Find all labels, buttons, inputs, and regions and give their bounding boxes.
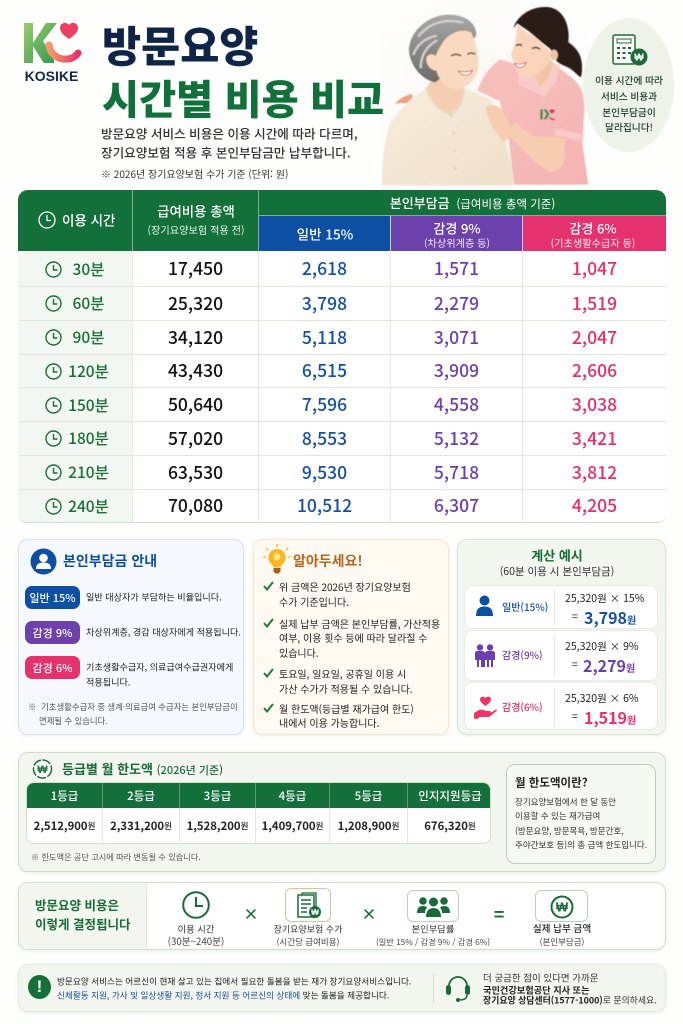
- header: reduced 9%: 감경 9%: [433, 218, 481, 238]
- note 4: 월 한도액(등급별 재가급여 한도): [279, 701, 414, 716]
- formula: usage time: [168, 891, 224, 948]
- elderly woman eyes and mouth: [451, 53, 475, 56]
- guide item: reduced 6: 감경 6%: [33, 660, 72, 676]
- title line 1: 방문요양: [102, 14, 258, 75]
- header: usage time: [18, 190, 133, 251]
- header: general 15%: 일반 15%: [297, 223, 353, 243]
- example card: general: 3,798원: [584, 605, 636, 629]
- caregiver shirt: [478, 59, 588, 185]
- row 210분: 9,530: [302, 460, 347, 485]
- operator: ×: [361, 904, 377, 924]
- header: reduced 6%: (기초생활수급자 등): [551, 235, 635, 250]
- grade table: 1,528,200: [187, 818, 241, 834]
- service description: 방문요양 서비스는 어르신이 현재 살고 있는 집에서 필요한 돌봄을 받는 재가 장기요양서비스입니다.: [57, 976, 411, 988]
- row 210분: 210분: [68, 461, 109, 483]
- operator: =: [494, 901, 504, 927]
- caregiver hair: [513, 7, 569, 60]
- panel: cost formula: [18, 882, 666, 950]
- example card: general: 일반(15%): [502, 599, 548, 614]
- grade table: 원: [468, 820, 476, 832]
- example card: reduced 9: =: [572, 657, 578, 672]
- formula: usage time: (30분~240분): [168, 934, 224, 948]
- header: co-payment: 본인부담금 (급여비용 총액 기준): [390, 193, 555, 212]
- table header: [18, 190, 666, 251]
- row 180분: 57,020: [168, 426, 223, 451]
- row 30분: 30분: [73, 258, 104, 280]
- row 90분: 34,120: [168, 325, 223, 350]
- guide item: reduced 9: 차상위계층, 경감 대상자에게 적용됩니다.: [86, 624, 241, 638]
- callout text: 서비스 비용과: [601, 89, 657, 103]
- subtitle text: 방문요양 서비스 비용은 이용 시간에 따라 다르며,: [101, 124, 358, 143]
- heading: 본인부담금 안내: [63, 551, 157, 571]
- row 180분: 3,421: [572, 426, 617, 451]
- formula: actual payment: [533, 890, 591, 948]
- operator: ×: [243, 904, 259, 924]
- header: total benefit cost: [133, 190, 259, 251]
- row 90분: 90분: [73, 326, 104, 348]
- row 120분: 43,430: [168, 358, 223, 383]
- guide item: reduced 6: [25, 656, 233, 688]
- note 1: [263, 579, 411, 609]
- contact text: 더 궁금한 점이 있다면 가까운: [483, 970, 599, 984]
- icon: calculator with won coin: [612, 34, 648, 66]
- icon: KC heart mark: [24, 22, 82, 63]
- formula: usage time: 이용 시간: [178, 921, 214, 935]
- row 240분: [18, 490, 666, 523]
- note 1: 위 금액은 2026년 장기요양보험: [279, 579, 411, 594]
- logo: [24, 22, 82, 84]
- note 4: [263, 701, 414, 730]
- caregiver back hand: [395, 94, 413, 104]
- contact text: 장기요양 상담센터(1577-1000)로 문의하세요.: [483, 994, 657, 1007]
- row 60분: [18, 287, 666, 321]
- header: reduced 9%: (차상위계층 등): [424, 235, 490, 250]
- cardigan buttons: [449, 113, 453, 116]
- note 3: 가산 수가가 적용될 수 있습니다.: [279, 681, 413, 696]
- subheading: (60분 이용 시 본인부담금): [500, 564, 614, 579]
- subtitle text: [101, 124, 358, 162]
- callout text: 이용 시간에 따라: [595, 73, 663, 87]
- grade table: 원: [392, 820, 399, 832]
- elderly woman hair: [409, 15, 476, 82]
- callout text: [595, 73, 663, 134]
- note 3: 토요일, 일요일, 공휴일 이용 시: [279, 666, 406, 681]
- note 3: [263, 666, 413, 696]
- caregiver eyes and mouth: [516, 45, 540, 49]
- shirt logo: [540, 109, 549, 119]
- grade table: 1,409,700: [262, 818, 316, 834]
- icon: two people: [475, 644, 495, 667]
- caregiver neck: [528, 58, 558, 89]
- note 2: [263, 616, 440, 660]
- header: reduced 6%: 감경 6%: [569, 218, 617, 238]
- column 5등급: 5등급: [355, 788, 382, 804]
- row 210분: 63,530: [168, 460, 223, 485]
- row 240분: 70,080: [168, 493, 223, 518]
- icon: single person: [476, 596, 493, 616]
- row 30분: 17,450: [168, 256, 223, 281]
- row 90분: 5,118: [302, 325, 347, 350]
- cost table: [18, 190, 666, 523]
- column 3등급: [180, 783, 256, 808]
- row 210분: [18, 456, 666, 490]
- guide item: reduced 6: 적용됩니다.: [86, 674, 130, 688]
- example card: reduced 6: [464, 682, 658, 730]
- panel: footer information: [18, 964, 666, 1012]
- row 60분: 60분: [73, 292, 104, 314]
- grade table: 1,208,900: [338, 818, 392, 834]
- formula: insurance fee: ₩: [311, 908, 319, 917]
- panel: notes: [253, 539, 449, 735]
- guide item: reduced 9: 감경 9%: [33, 624, 72, 640]
- footnote: base year: ※ 2026년 장기요양보험 수가 기준 (단위: 원): [101, 166, 288, 181]
- photo illustration: caregiver and elderly woman: [382, 6, 589, 186]
- row 150분: [18, 388, 666, 422]
- example card: reduced 6: 1,519원: [584, 704, 636, 728]
- subtitle text: 장기요양보험 적용 후 본인부담금만 납부합니다.: [101, 143, 351, 162]
- guide note: 면제될 수 있습니다.: [39, 715, 108, 727]
- row 90분: [18, 321, 666, 354]
- grade table: 2,512,900: [34, 818, 88, 834]
- icon: won badge: ₩: [37, 764, 48, 776]
- guide note: ※ 기초생활수급자 중 생계·의료급여 수급자는 본인부담금이: [28, 701, 238, 713]
- column 2등급: [103, 783, 180, 808]
- service description: [57, 976, 411, 1002]
- column 4등급: 4등급: [279, 788, 306, 804]
- row 120분: 6,515: [302, 358, 347, 383]
- row 60분: 3,798: [302, 291, 347, 316]
- row 30분: [18, 251, 666, 287]
- title: [102, 14, 384, 126]
- callout text: 본인부담금이: [602, 105, 656, 119]
- row 90분: 2,047: [572, 325, 617, 350]
- row 150분: 4,558: [434, 392, 479, 417]
- cardigan collar: [427, 87, 464, 113]
- column 5등급: [330, 783, 408, 808]
- row 240분: 240분: [68, 495, 109, 517]
- example card: reduced 9: 25,320원 × 9%: [565, 638, 639, 653]
- guide item: reduced 6: 기초생활수급자, 의료급여수급권자에게: [86, 659, 233, 673]
- row 60분: 1,519: [572, 291, 617, 316]
- elderly woman face: [426, 31, 478, 89]
- definition box: [506, 764, 656, 864]
- icon: exclamation: !: [37, 977, 42, 996]
- formula: insurance fee: [274, 888, 342, 948]
- row 180분: 8,553: [302, 426, 347, 451]
- example card: reduced 9: 감경(9%): [502, 647, 543, 662]
- formula: co-pay rate: 본인부담률: [412, 921, 454, 935]
- row 60분: 2,279: [434, 291, 479, 316]
- row 30분: 1,571: [434, 256, 479, 281]
- caregiver forearm: [507, 122, 565, 171]
- callout text: 달라집니다!: [605, 120, 653, 134]
- formula: insurance fee: 장기요양보험 수가: [274, 922, 342, 936]
- formula heading: [19, 883, 147, 951]
- definition box: (방문요양, 방문목욕, 방문간호,: [515, 825, 624, 837]
- icon: won badge: [32, 759, 52, 779]
- logo wordmark: KOSIKE: [25, 68, 78, 84]
- row 210분: 3,812: [572, 460, 617, 485]
- contact text: 국민건강보험공단 지사 또는: [483, 982, 590, 996]
- header: usage time: 이용 시간: [62, 209, 115, 229]
- row 60분: 25,320: [168, 291, 223, 316]
- row 180분: 180분: [68, 427, 109, 449]
- row 150분: 150분: [68, 394, 109, 416]
- heading: 등급별 월 한도액 (2026년 기준): [62, 758, 223, 778]
- definition box: 장기요양보험에서 한 달 동안: [515, 796, 616, 808]
- example card: general: =: [572, 609, 578, 624]
- note list: [263, 579, 440, 730]
- heading: 알아두세요!: [293, 551, 363, 571]
- row 150분: 50,640: [168, 392, 223, 417]
- note 2: 여부, 이용 횟수 등에 따라 달라질 수: [279, 630, 427, 645]
- formula: co-pay rate: [376, 890, 490, 948]
- header: total benefit cost: 급여비용 총액: [157, 200, 235, 220]
- row 90분: 3,071: [434, 325, 479, 350]
- note 1: 수가 기준입니다.: [279, 594, 349, 609]
- column 2등급: 2등급: [127, 788, 155, 804]
- icon: light bulb: [263, 544, 291, 574]
- definition box: 월 한도액이란?: [515, 774, 588, 790]
- icon: person: [30, 548, 56, 574]
- panel: co-payment guide: [18, 539, 244, 735]
- grade table: 원: [241, 820, 248, 832]
- grade note: ※ 한도액은 공단 고시에 따라 변동될 수 있습니다.: [31, 851, 201, 863]
- row 240분: 6,307: [434, 493, 479, 518]
- row 30분: 1,047: [572, 256, 617, 281]
- panel: monthly limit by grade: [18, 752, 666, 872]
- example card: reduced 9: 2,279원: [583, 653, 635, 677]
- elderly woman neck: [427, 75, 464, 112]
- note 2: 있습니다.: [279, 645, 319, 660]
- service description: 신체활동 지원, 가사 및 일상생활 지원, 정서 지원 등 어르신의 상태에 맞는 돌봄을 제공합니다.: [57, 990, 389, 1002]
- note 2: 실제 납부 금액은 본인부담률, 가산적용: [279, 616, 440, 631]
- icon: exclamation: [28, 975, 51, 999]
- example card: reduced 6: 25,320원 × 6%: [565, 690, 639, 705]
- grade table: 2,331,200: [110, 818, 164, 834]
- grade table: 676,320: [424, 818, 468, 834]
- row 120분: [18, 354, 666, 388]
- row 240분: 4,205: [572, 493, 617, 518]
- icon: calculator with won coin: ₩: [634, 52, 644, 64]
- caregiver collar: [518, 62, 560, 97]
- row 240분: 10,512: [297, 493, 352, 518]
- caregiver sleeve hem: [554, 128, 584, 142]
- formula: actual payment: 실제 납부 금액: [533, 921, 591, 935]
- guide item: general: 일반 대상자가 부담하는 비율입니다.: [86, 589, 222, 603]
- header: general 15%: [259, 215, 391, 251]
- row 210분: 5,718: [434, 460, 479, 485]
- grade table: [26, 782, 491, 844]
- example card: general: 25,320원 × 15%: [565, 590, 644, 605]
- guide item: reduced 9: [25, 621, 241, 644]
- row 120분: 3,909: [434, 358, 479, 383]
- formula heading: 방문요양 비용은: [35, 895, 119, 914]
- row 180분: [18, 422, 666, 456]
- column 1등급: 1등급: [51, 788, 78, 804]
- example card: reduced 6: =: [572, 708, 578, 723]
- formula heading: 이렇게 결정됩니다: [35, 914, 131, 933]
- panel: calculation example: [457, 539, 666, 735]
- row 120분: 120분: [68, 360, 109, 382]
- example card: general: [464, 585, 658, 629]
- caregiver ponytail: [556, 41, 582, 77]
- column 3등급: 3등급: [204, 788, 231, 804]
- row 120분: 2,606: [572, 358, 617, 383]
- guide item: general: [25, 586, 222, 609]
- caregiver ear: [550, 50, 558, 60]
- formula: co-pay rate: (일반 15% / 감경 9% / 감경 6%): [376, 936, 490, 948]
- grade table: 원: [88, 820, 95, 832]
- formula: actual payment: (본인부담금): [540, 936, 584, 948]
- icon: heart in hand: [474, 696, 497, 719]
- example card: reduced 9: [464, 630, 658, 681]
- grade table: 원: [316, 820, 323, 832]
- definition box: 주야간보호 등)의 총 금액 한도입니다.: [515, 839, 647, 851]
- heading: 계산 예시: [531, 546, 583, 564]
- caregiver face: [511, 24, 551, 77]
- grade table: 원: [164, 820, 172, 832]
- definition box: 이용할 수 있는 재가급여: [515, 810, 600, 822]
- row 150분: 7,596: [302, 392, 347, 417]
- title line 2: 시간별 비용 비교: [102, 67, 384, 126]
- guide note: [28, 701, 238, 727]
- caregiver hand: [486, 105, 514, 142]
- header: total benefit cost: (장기요양보험 적용 전): [148, 222, 244, 237]
- icon: headset: [446, 976, 470, 1002]
- guide item: general: 일반 15%: [29, 590, 76, 606]
- formula: insurance fee: (시간당 급여비용): [277, 936, 339, 948]
- column 4등급: [256, 783, 330, 808]
- column 인지지원등급: 인지지원등급: [418, 788, 482, 804]
- note 4: 내에서 이용 가능합니다.: [279, 715, 379, 730]
- header: reduced 9%: [391, 215, 523, 251]
- elderly woman cardigan: [382, 88, 513, 185]
- column 1등급: [27, 783, 103, 808]
- callout bubble: [583, 18, 674, 152]
- row 30분: 2,618: [302, 256, 347, 281]
- header: reduced 6%: [523, 215, 666, 251]
- row 180분: 5,132: [434, 426, 479, 451]
- row 150분: 3,038: [572, 392, 617, 417]
- formula: actual payment: ₩: [556, 900, 569, 914]
- contact text: [483, 970, 657, 1007]
- example card: reduced 6: 감경(6%): [502, 699, 543, 714]
